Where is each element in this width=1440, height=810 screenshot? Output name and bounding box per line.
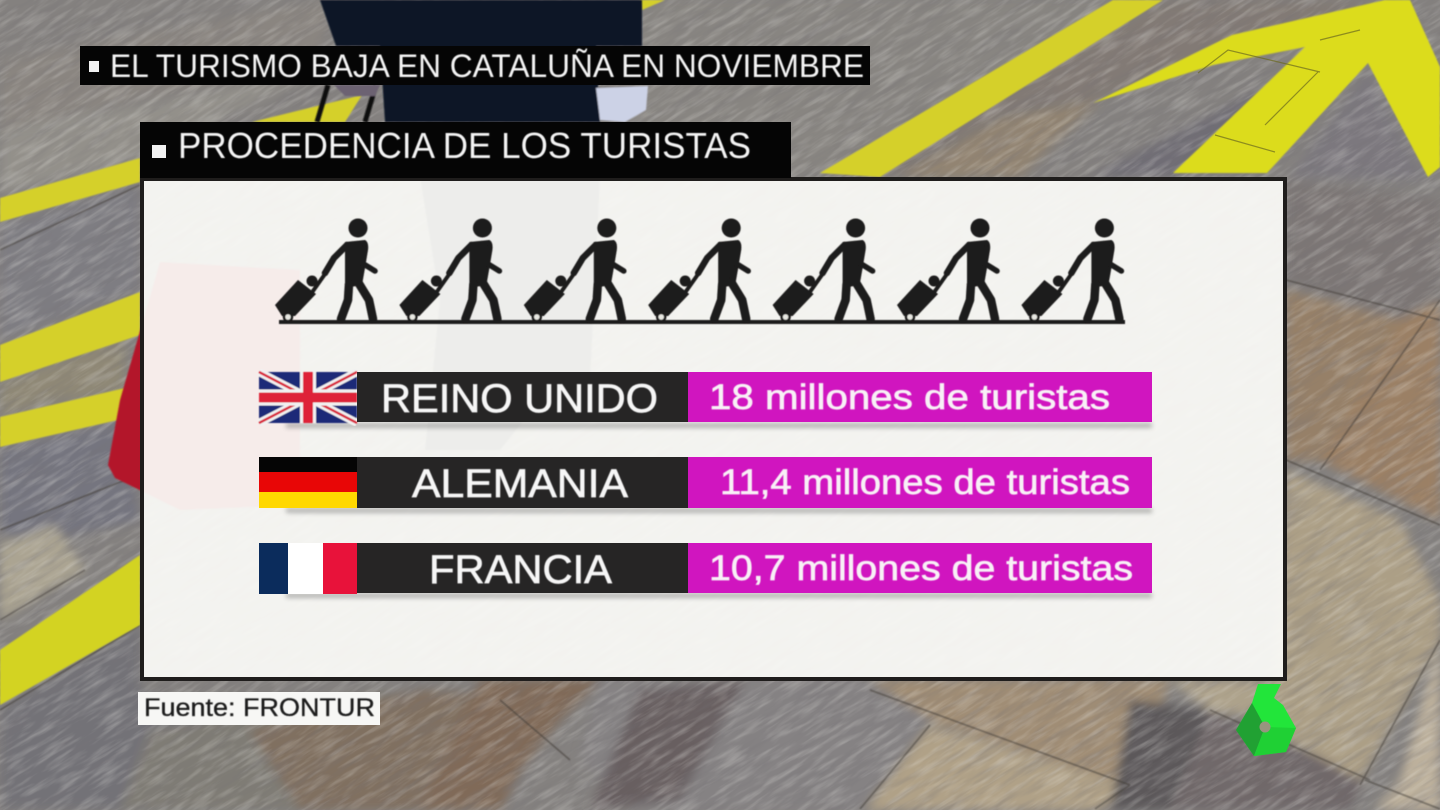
row: Reino Unido: REINO UNIDO <box>381 377 658 421</box>
logo: green channel mark <box>1236 684 1296 756</box>
row: Reino Unido <box>259 372 1152 428</box>
row: Francia: 10,7 millones de turistas <box>709 549 1133 588</box>
title bar: EL TURISMO BAJA EN CATALUÑA EN NOVIEMBRE <box>110 48 864 84</box>
row: Alemania: ALEMANIA <box>412 462 628 506</box>
flag: France <box>259 543 357 594</box>
tile joints <box>0 185 1440 809</box>
flag: Germany <box>259 457 357 508</box>
arrow cracks <box>1198 30 1360 152</box>
row: Alemania: 11,4 millones de turistas <box>720 463 1130 502</box>
flag: United Kingdom <box>259 372 357 423</box>
traveller <box>317 0 648 450</box>
row: Francia: FRANCIA <box>429 548 612 592</box>
source label: Fuente: FRONTUR <box>144 694 375 722</box>
row: Francia <box>259 543 1152 598</box>
icon row: seven travellers with suitcases on a ground line <box>275 218 1125 324</box>
red suitcase <box>108 262 300 510</box>
heading bar: procedencia: PROCEDENCIA DE LOS TURISTAS <box>178 125 751 166</box>
heading bar: procedencia <box>140 122 791 178</box>
panel: white translucent card <box>142 179 1285 679</box>
row: Alemania <box>259 457 1152 513</box>
row: Reino Unido: 18 millones de turistas <box>709 378 1110 417</box>
